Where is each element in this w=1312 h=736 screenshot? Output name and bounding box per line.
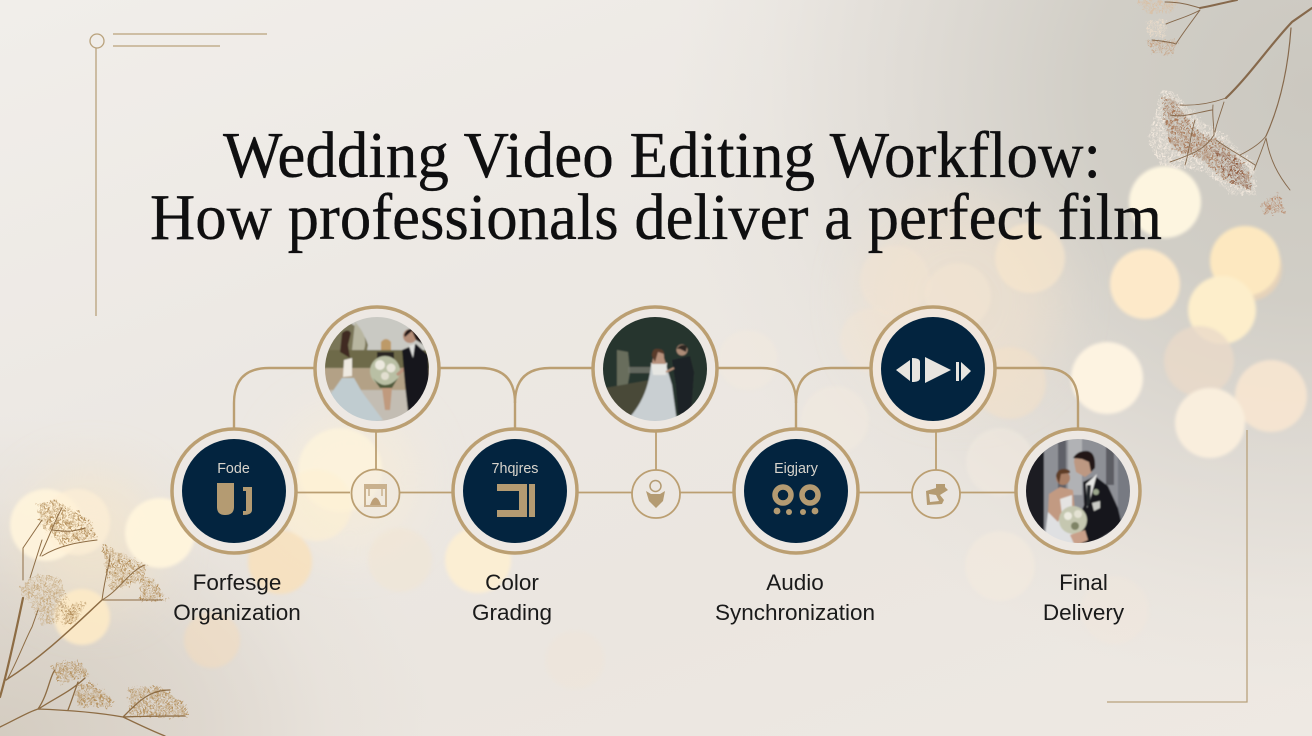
dried flowers bottom left bbox=[0, 500, 188, 736]
title: Wedding Video Editing Workflow: bbox=[223, 119, 1101, 192]
top node: couple photo one bbox=[315, 307, 439, 431]
top node: couple photo two bbox=[593, 307, 717, 431]
step 4 node: couple photo bbox=[1016, 429, 1140, 553]
badge text: Fode bbox=[217, 461, 250, 477]
step 1 label: Organization bbox=[173, 600, 301, 625]
small icon node: heart tie bbox=[632, 470, 680, 518]
step 2 label: Grading bbox=[472, 600, 552, 625]
step 4 label: Delivery bbox=[1043, 600, 1125, 625]
step 3 label: Synchronization bbox=[715, 600, 875, 625]
step 4 label: Final bbox=[1059, 570, 1108, 595]
step 3 label: Audio bbox=[766, 570, 824, 595]
playback icon bbox=[896, 357, 971, 383]
decorative frame top left bbox=[90, 34, 267, 316]
dried flowers top right bbox=[1136, 0, 1312, 214]
step 1 label: Forfesge bbox=[193, 570, 281, 595]
small icon node: clapper box bbox=[912, 470, 960, 518]
step 2 node: navy badge bbox=[453, 429, 577, 553]
badge icon bbox=[217, 483, 252, 515]
small icon node: film frame bbox=[352, 470, 400, 518]
decorative frame bottom right bbox=[1107, 430, 1247, 702]
badge text: 7hqjres bbox=[492, 461, 538, 477]
step 2 label: Color bbox=[485, 570, 539, 595]
bokeh background lights bbox=[10, 166, 1307, 690]
badge icon bbox=[497, 484, 535, 517]
step 3 node: navy badge bbox=[734, 429, 858, 553]
title: How professionals deliver a perfect film bbox=[150, 181, 1162, 254]
connector lines bbox=[234, 368, 1078, 492]
top node: navy badge with playback icon bbox=[871, 307, 995, 431]
badge text: Eigjary bbox=[774, 461, 819, 477]
badge icon bbox=[774, 487, 818, 515]
step 1 node: navy badge bbox=[172, 429, 296, 553]
